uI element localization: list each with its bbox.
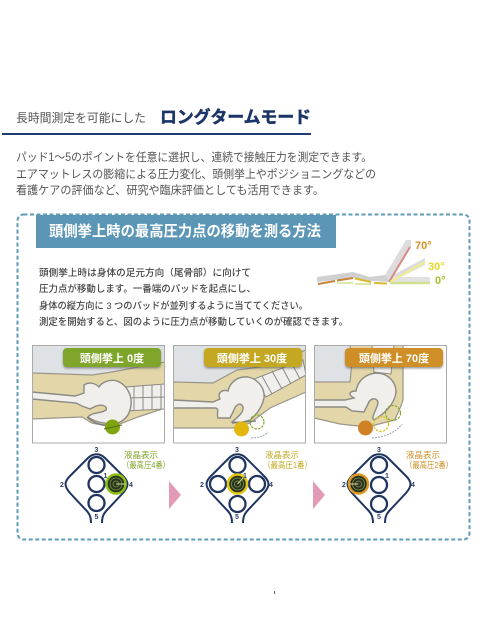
panel: method (dashed frame) [18, 214, 470, 540]
heading: long term mode: 長時間測定を可能にした [16, 111, 146, 125]
spine [125, 384, 165, 411]
pad diagram: highest pressure pad 1: 液晶表示 [265, 450, 299, 460]
method description text [39, 267, 348, 328]
panel: angle 0 illustration [32, 345, 165, 443]
intro text block [16, 150, 376, 197]
pad diagram: highest pressure pad 1: 1 [243, 473, 247, 480]
femur and pelvis [314, 373, 396, 420]
pad diagram: highest pressure pad 1: 2 [200, 482, 204, 489]
pad diagram: highest pressure pad 1: （最高圧1番） [263, 460, 312, 470]
bed angle diagram: 30° [428, 261, 445, 273]
intro text block: エアマットレスの膨縮による圧力変化、頭側挙上やポジショニングなどの [16, 167, 376, 181]
pad diagram: highest pressure pad 2: 2 [342, 482, 346, 489]
pad diagram: highest pressure pad 4: 2 [60, 482, 64, 489]
badge: 30 degrees: 頭側挙上 30度 [217, 351, 287, 365]
pad diagram: highest pressure pad 2: 5 [377, 514, 381, 521]
method description text: 測定を開始すると、図のように圧力点が移動していくのが確認できます。 [39, 316, 348, 328]
pad diagram: highest pressure pad 2: 3 [377, 447, 381, 454]
pad diagram: highest pressure pad 4: 3 [95, 447, 99, 454]
pad diagram: highest pressure pad 2: 1 [385, 473, 389, 480]
spine [254, 360, 306, 397]
pad diagram: highest pressure pad 2: 4 [411, 482, 415, 489]
femur and pelvis [173, 377, 264, 422]
panel: angle 70 illustration [314, 345, 447, 443]
badge: 70 degrees: 頭側挙上 70度 [359, 351, 429, 365]
heading: long term mode [2, 107, 311, 135]
panel heading [36, 215, 336, 248]
method description text: 頭側挙上時は身体の足元方向（尾骨部）に向けて [39, 267, 251, 279]
badge: 0 degrees: 頭側挙上 0度 [80, 351, 144, 365]
pad diagram: highest pressure pad 1 [200, 447, 312, 523]
heading: long term mode: ロングタームモード [160, 107, 311, 127]
pad diagram: highest pressure pad 1: 3 [235, 447, 239, 454]
bed angle diagram: 0° [435, 275, 446, 287]
pad diagram: highest pressure pad 1: 4 [269, 482, 273, 489]
panel heading: 頭側挙上時の最高圧力点の移動を測る方法 [49, 222, 321, 240]
pad diagram: highest pressure pad 4: 液晶表示 [124, 450, 158, 460]
pad diagram: highest pressure pad 2 [342, 447, 453, 523]
pad diagram: highest pressure pad 4: 4 [129, 482, 133, 489]
femur and pelvis [32, 380, 131, 423]
pad diagram: highest pressure pad 1: 5 [235, 514, 239, 521]
arrow: step 2 to 3 [313, 481, 325, 509]
bed angle diagram: 70° [415, 240, 432, 252]
bed angle diagram [317, 240, 446, 287]
pad diagram: highest pressure pad 2: （最高圧2番） [405, 460, 453, 470]
pad diagram: highest pressure pad 2: 液晶表示 [406, 450, 440, 460]
pad diagram: highest pressure pad 4: 5 [95, 514, 99, 521]
method description text: 圧力点が移動します。一番端のパッドを起点にし、 [39, 283, 256, 295]
intro text block: 看護ケアの評価など、研究や臨床評価としても活用できます。 [16, 183, 324, 197]
method description text: 身体の縦方向に 3 つのパッドが並列するように当ててください。 [39, 300, 308, 312]
pad diagram: highest pressure pad 4: 1 [104, 473, 108, 480]
pad diagram: highest pressure pad 4: （最高圧4番） [122, 460, 170, 470]
panel: angle 30 illustration [173, 345, 306, 443]
arrow: step 1 to 2 [169, 481, 181, 509]
intro text block: パッド1～5のポイントを任意に選択し、連続で接触圧力を測定できます。 [16, 150, 372, 164]
pad diagram: highest pressure pad 4 [60, 447, 170, 523]
